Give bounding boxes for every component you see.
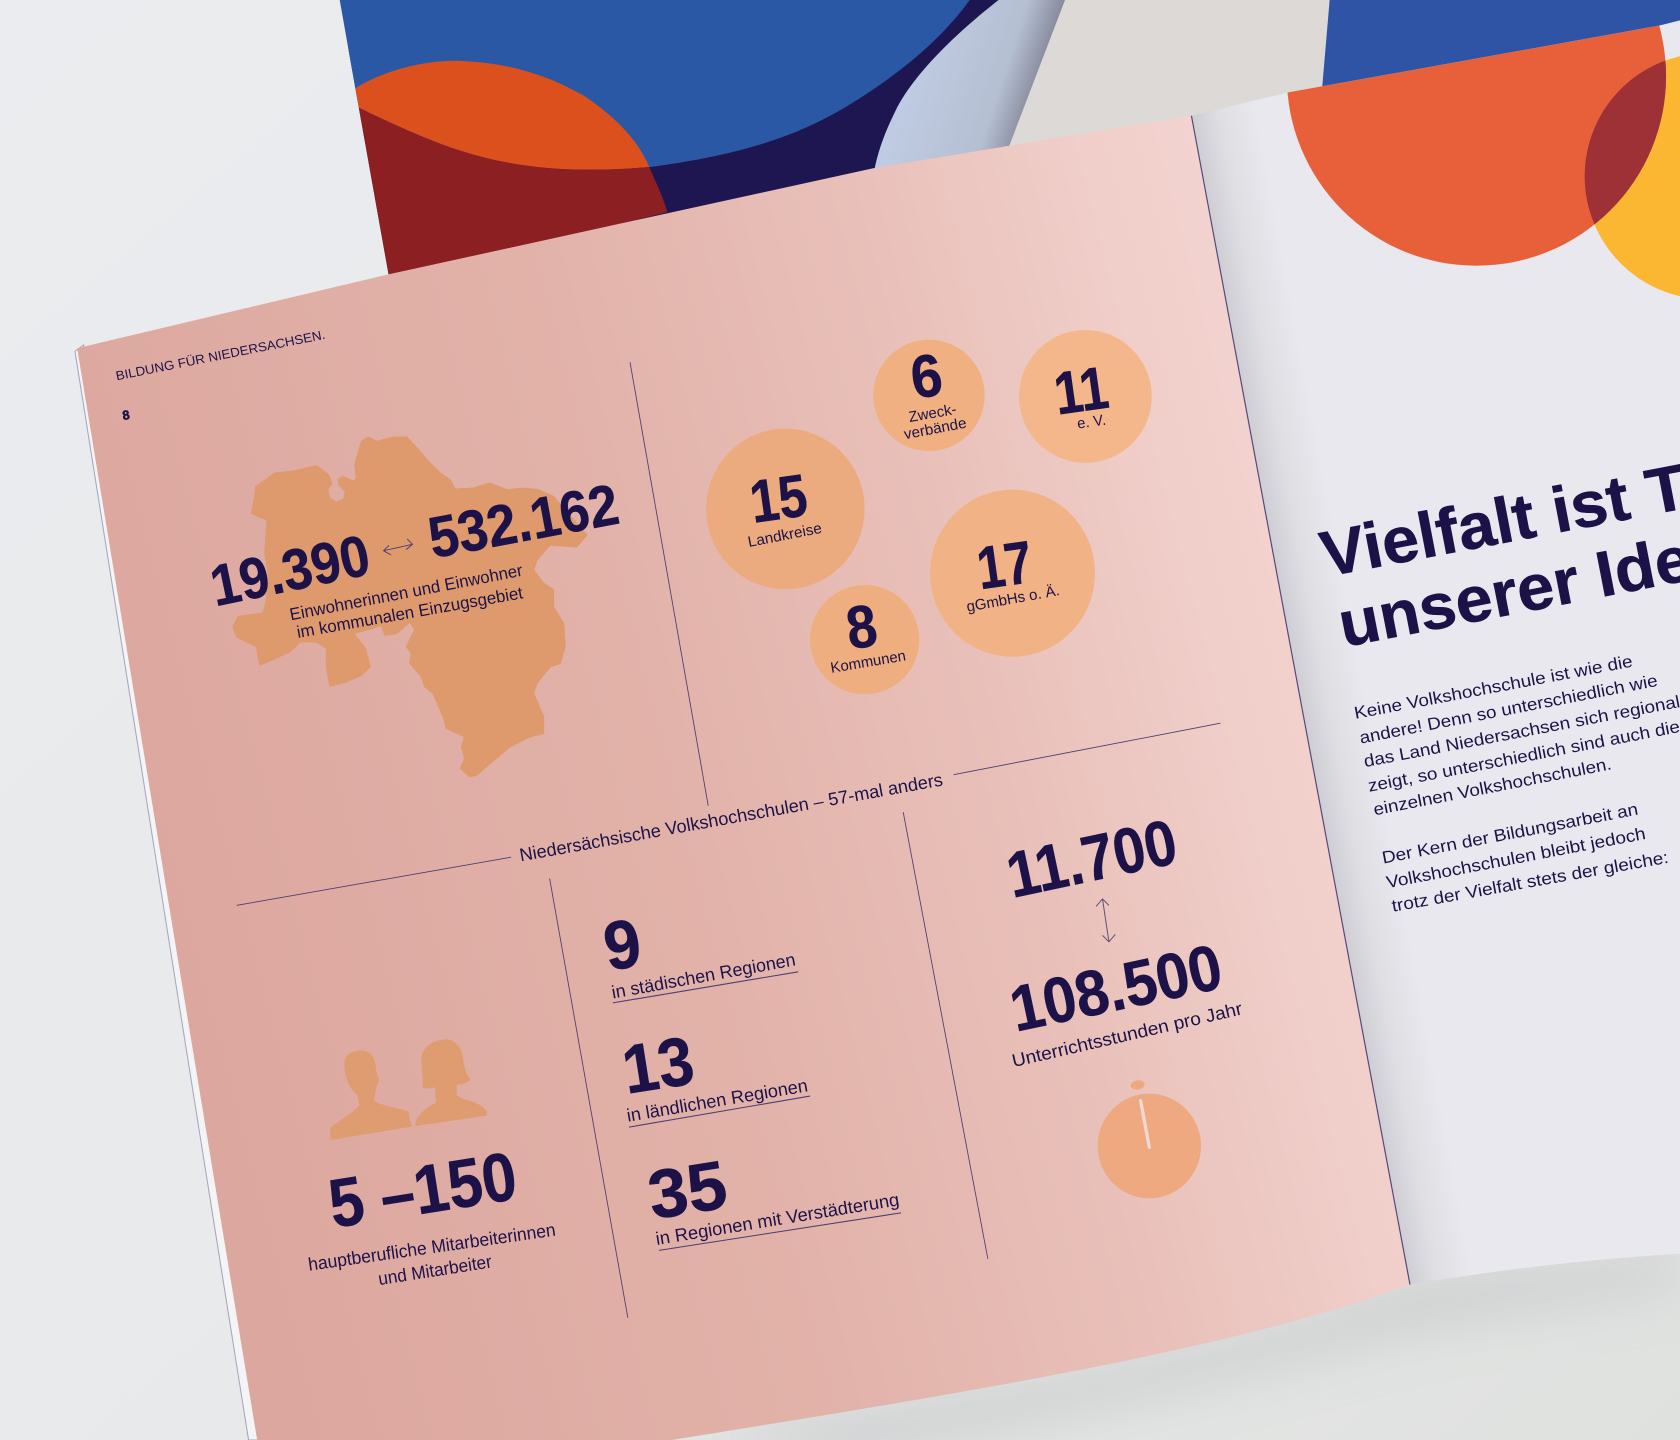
stat: population range: Einwohnerinnen und Einwohner [288, 560, 524, 624]
stat: 35 urbanising regions: 35 [643, 1146, 732, 1234]
stat: 35 urbanising regions [643, 1146, 901, 1250]
intro paragraph: andere! Denn so unterschiedlich wie [1358, 670, 1659, 747]
icon: stopwatch [1098, 1079, 1201, 1198]
intro paragraph: das Land Niedersachsen sich regional [1362, 691, 1680, 771]
divider lines [237, 362, 1220, 1318]
circle: 6 Zweckverbände: Zweck- [907, 401, 958, 426]
spine line [1191, 116, 1410, 1285]
background cream cover [1007, 0, 1330, 148]
headline: Vielfalt ist T [1314, 450, 1680, 591]
circle: 11 e. V. [1019, 330, 1152, 463]
second paragraph [1382, 806, 1668, 912]
stat: population range: im kommunalen Einzugsgebiet [295, 582, 525, 642]
stat: staff: hauptberufliche Mitarbeiterinnen [307, 1220, 557, 1275]
stat: teaching hours: Unterrichtsstunden pro Jahr [1010, 999, 1244, 1071]
stat: 9 urban regions: in städischen Regionen [610, 949, 797, 1003]
arrow: two-way vertical [1096, 899, 1115, 942]
panel: left pink page [77, 116, 1410, 1440]
graphic: overlapping orange and yellow circles [1287, 0, 1680, 299]
stat: 9 urban regions: 9 [598, 904, 646, 986]
circle: 6 Zweckverbände: 6 [906, 341, 947, 411]
intro paragraph [1352, 651, 1680, 819]
arrow: two-way horizontal [384, 539, 412, 555]
circle: 8 Kommunen [810, 585, 919, 694]
circle: 15 Landkreise: Landkreise [746, 520, 823, 551]
right page [1179, 0, 1680, 1318]
circle: 8 Kommunen: Kommunen [829, 647, 907, 677]
stat: 13 rural regions [617, 1022, 810, 1127]
stat: staff: 5 –150 [324, 1137, 522, 1243]
stat: teaching hours [1000, 805, 1244, 1071]
background brochure cover with circles [340, 0, 1065, 274]
map of Niedersachsen [233, 437, 587, 777]
section heading: Niedersächsische Volkshochschulen – 57-mal anders [518, 770, 944, 865]
stat: 13 rural regions: in ländlichen Regionen [625, 1075, 809, 1126]
icon: two people [330, 1039, 487, 1140]
intro paragraph: zeigt, so unterschiedlich sind auch die [1366, 716, 1680, 796]
stat: teaching hours: 108.500 [1004, 931, 1228, 1045]
circle: 17 gGmbHs [930, 490, 1095, 657]
circle: 6 Zweckverbände: verbände [903, 415, 968, 443]
circle: 15 Landkreise: 15 [746, 461, 811, 536]
circle: 11 e. V.: 11 [1050, 354, 1112, 428]
stat: 9 urban regions [598, 904, 798, 1003]
circle: 11 e. V.: e. V. [1076, 412, 1107, 433]
floor shadow under booklet [664, 1254, 1680, 1440]
stat: population range [205, 473, 624, 642]
circle: 15 Landkreise [706, 429, 865, 589]
stat: 13 rural regions: 13 [617, 1022, 699, 1109]
second paragraph: trotz der Vielfalt stets der gleiche: [1390, 847, 1670, 916]
stat: population range: 532.162 [423, 473, 624, 571]
stat: 35 urbanising regions: in Regionen mit Verstädterung [654, 1189, 901, 1249]
stat: staff: und Mitarbeiter [377, 1251, 493, 1289]
headline: unserer Ide [1333, 522, 1680, 661]
circle: 17 gGmbHs: 17 [973, 528, 1036, 602]
running header: BILDUNG FÜR NIEDERSACHSEN. [114, 327, 326, 383]
back page edge sliver [75, 345, 261, 1440]
intro paragraph: einzelnen Volkshochschulen. [1372, 753, 1613, 819]
background blue brochure top right [1322, 0, 1680, 88]
circle: 17 gGmbHs: gGmbHs o. Ä. [965, 582, 1061, 616]
second paragraph: Der Kern der Bildungsarbeit an [1380, 799, 1640, 867]
circle: 8 Kommunen: 8 [842, 592, 881, 662]
second paragraph: Volkshochschulen bleibt jedoch [1385, 823, 1647, 892]
headline [1317, 464, 1680, 646]
stat: staff [307, 1137, 557, 1289]
intro paragraph: Keine Volkshochschule ist wie die [1352, 651, 1634, 723]
stat: teaching hours: 11.700 [1000, 805, 1183, 912]
page number: 8 [121, 407, 131, 423]
stat: population range: 19.390 [205, 524, 375, 619]
circle: 6 Zweckverbände [873, 340, 985, 451]
